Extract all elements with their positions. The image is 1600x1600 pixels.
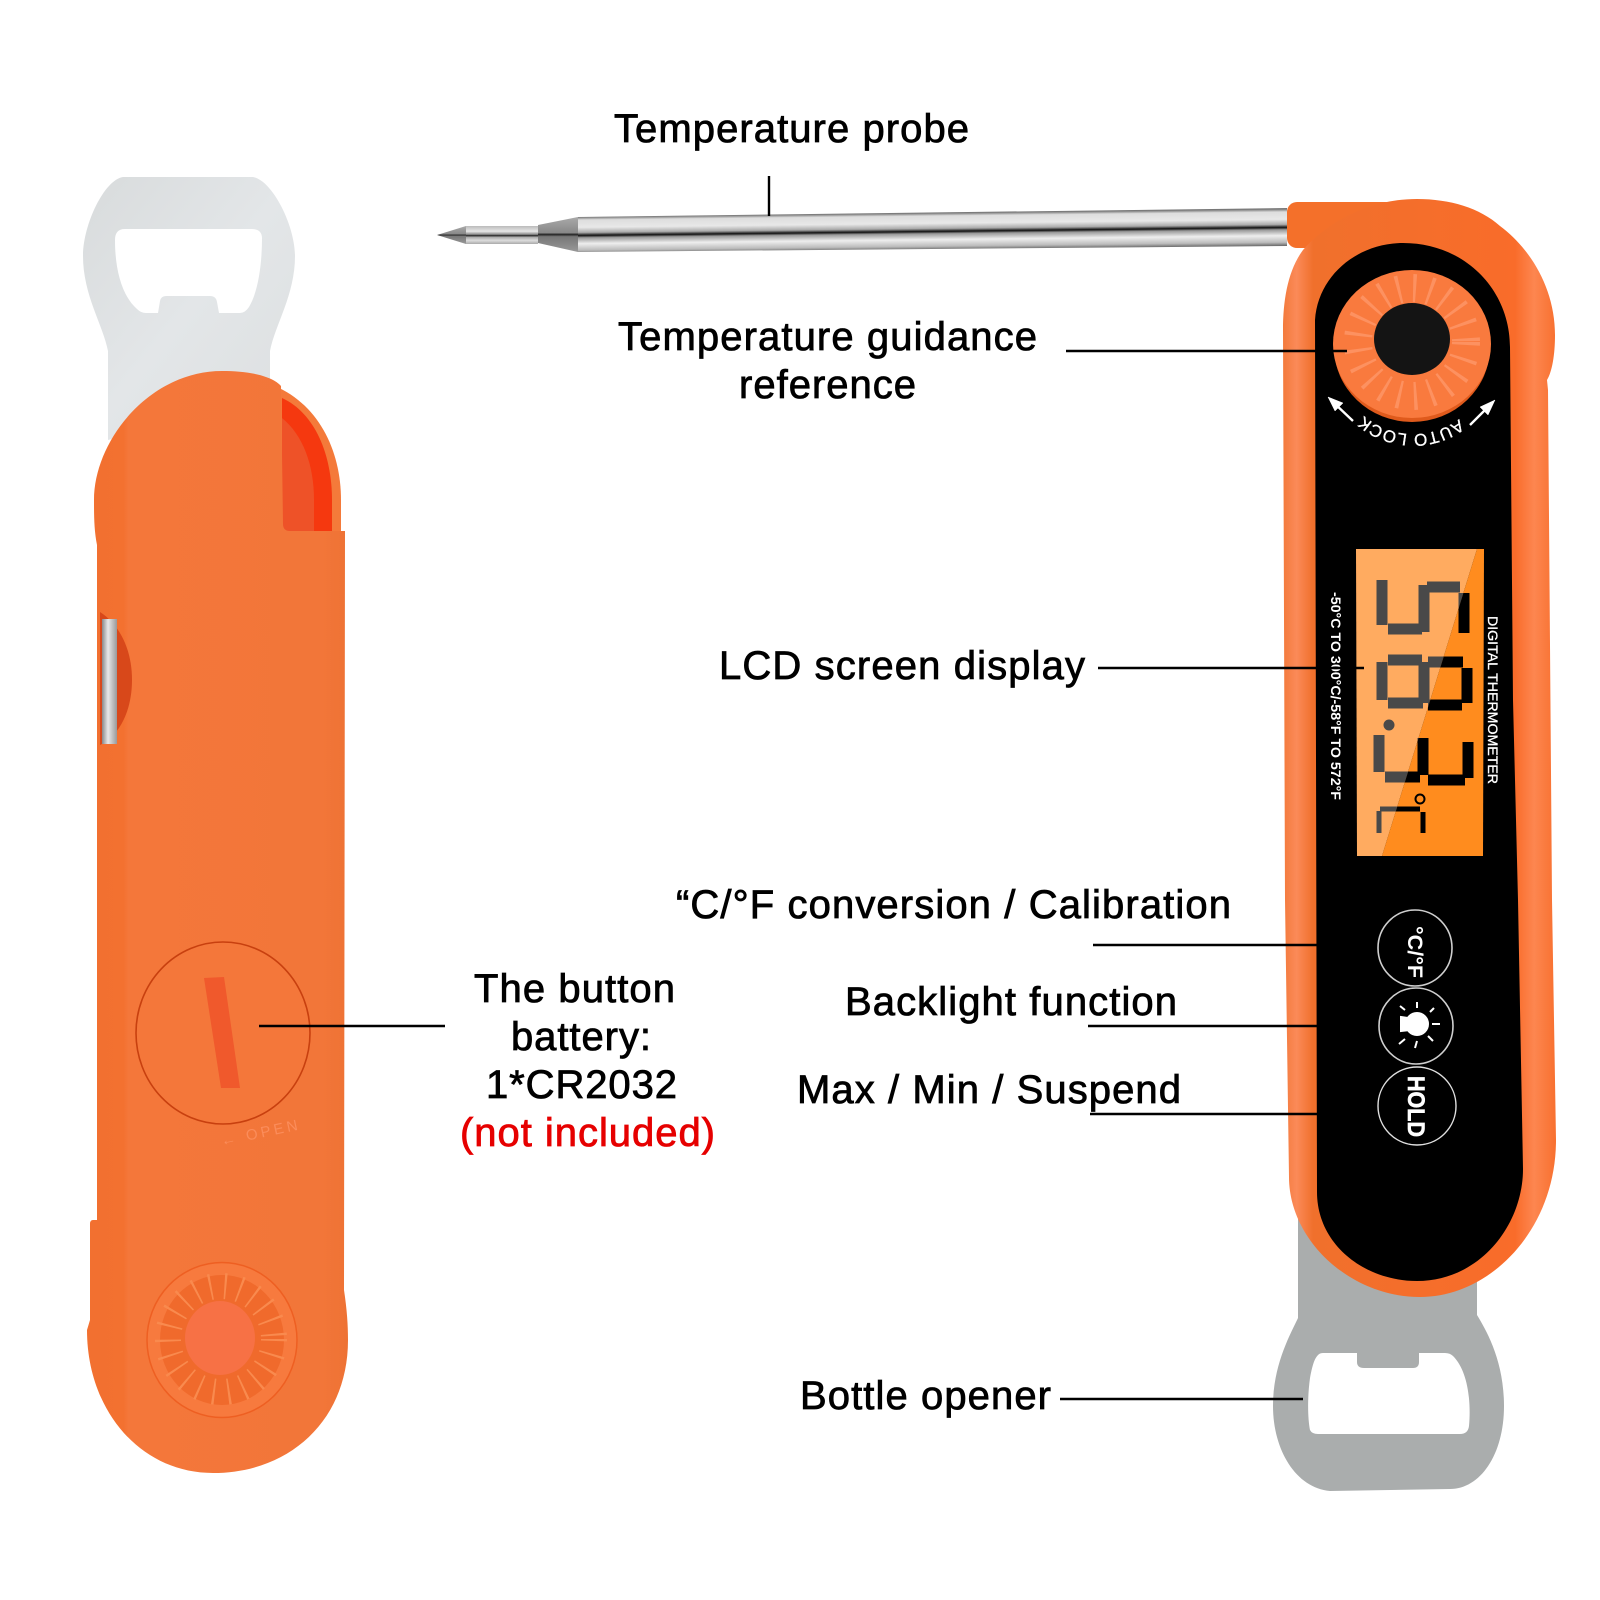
label: max min suspend: Max / Min / Suspend (797, 1068, 1181, 1112)
note: not included: (not included) (460, 1111, 715, 1155)
leader: bottle opener (1060, 1398, 1303, 1400)
button: backlight (1379, 988, 1453, 1064)
label: button battery: battery: (511, 1015, 651, 1059)
battery cover (136, 942, 310, 1150)
left rear dial (147, 1262, 297, 1418)
label: C/F conversion and calibration: “C/°F conversion / Calibration (676, 883, 1231, 927)
probe hinge (1287, 202, 1397, 248)
range text: -50°C TO 300°C/-58°F TO 572°F (1328, 592, 1344, 800)
digital thermometer text: DIGITAL THERMOMETER (1485, 616, 1501, 784)
button: unit conversion (1378, 910, 1452, 986)
label: temperature guidance reference (618, 315, 1037, 407)
button: hold (1378, 1067, 1456, 1145)
leader: backlight (1088, 1025, 1317, 1027)
temperature probe (437, 208, 1287, 252)
right device: front view of thermometer (437, 199, 1556, 1491)
dial center (1374, 303, 1450, 375)
LCD segments on bright area (1379, 580, 1468, 833)
left device: back view of thermometer (83, 177, 348, 1473)
left cutout with stored probe (100, 612, 132, 745)
LCD screen (1356, 549, 1484, 856)
LCD segments on shaded area (1396, 593, 1474, 833)
auto lock text: AUTO LOCK (1357, 416, 1462, 446)
left bottle opener (83, 177, 295, 440)
black faceplate (1315, 243, 1523, 1281)
label: temperature probe: Temperature probe (614, 107, 969, 151)
bulb icon (1399, 1002, 1440, 1048)
right bottle opener (1273, 1210, 1504, 1491)
temperature dial (1333, 270, 1491, 422)
label: LCD screen display: LCD screen display (719, 644, 1085, 688)
label: temperature guidance reference: reference (739, 363, 916, 407)
label: button battery: 1*CR2032 (486, 1063, 677, 1107)
leader: C/F conversion (1093, 944, 1317, 946)
leader: LCD display (1098, 667, 1364, 669)
button: unit conversion: °C/°F (1403, 926, 1426, 978)
label: button battery (460, 967, 715, 1155)
open marking: ← OPEN (219, 1117, 299, 1150)
leader: temperature probe (768, 176, 770, 216)
right orange body (1283, 199, 1556, 1297)
leader: temperature guidance (1066, 350, 1347, 352)
leader: button battery (259, 1025, 445, 1027)
label: temperature guidance reference: Temperature guidance (618, 315, 1037, 359)
label: bottle opener: Bottle opener (800, 1374, 1051, 1418)
leader: max min suspend (1090, 1113, 1317, 1115)
label: button battery: The button (474, 967, 675, 1011)
auto lock arrows (1328, 397, 1495, 425)
label: backlight function: Backlight function (845, 980, 1177, 1024)
left orange body (87, 371, 348, 1473)
battery cover slot (204, 977, 240, 1088)
left back compartment behind sliding cover (270, 384, 341, 531)
button: hold: HOLD (1402, 1076, 1429, 1137)
